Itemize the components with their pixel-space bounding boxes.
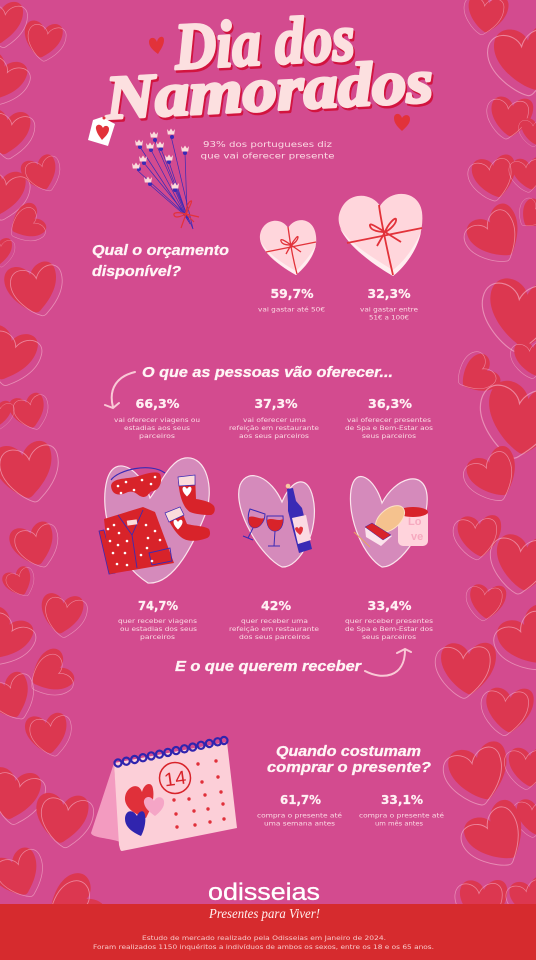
stat: offer trips: vai oferecer viagens ou <box>114 416 200 424</box>
stat: 32,3%: vai gastar entre <box>360 306 418 314</box>
stat: receive meal: refeição em restaurante <box>229 625 319 633</box>
stat: offer spa: de Spa e Bem-Estar aos <box>345 424 434 432</box>
stat: 32,3%: 51€ a 100€ <box>369 314 409 322</box>
icon: large gift heart <box>339 194 422 276</box>
heading: when they buy: Quando costumam <box>276 744 421 760</box>
icon: red heart left of title <box>149 37 164 54</box>
title <box>100 0 436 135</box>
stat: 33,1%: 33,1% <box>381 792 423 807</box>
stat: offer trips: estadias aos seus <box>124 424 191 432</box>
arrow: up to receive stats <box>365 649 411 676</box>
stat: 61,7%: compra o presente até <box>257 812 342 820</box>
tagline: Presentes para Viver! <box>208 907 320 922</box>
stat: receive spa: 33,4% <box>368 598 412 613</box>
stat: receive meal: dos seus parceiros <box>239 633 311 641</box>
footnote: Foram realizados 1150 inquéritos a indivíduos de ambos os sexos, entre os 18 e os 65 anos. <box>93 943 434 951</box>
stat: 59,7% <box>258 286 325 314</box>
stat: receive trips: ou estadias dos seus <box>120 625 198 633</box>
stat: offer meal: 37,3% <box>254 396 298 411</box>
footer band <box>0 904 536 960</box>
stat: receive meal: quer receber uma <box>241 617 308 625</box>
stat: receive trips <box>118 598 198 641</box>
icon: gift tag <box>88 116 115 146</box>
stat: receive trips: quer receber viagens <box>118 617 198 625</box>
stat: 61,7%: 61,7% <box>280 792 321 807</box>
heading: what people want to receive: E o que querem receber <box>175 659 363 675</box>
stat: receive trips: 74,7% <box>138 598 178 613</box>
stat: offer spa: vai oferecer presentes <box>347 416 432 424</box>
illustration: candle and matches <box>350 477 428 567</box>
stat: receive spa <box>345 598 434 641</box>
stat: offer spa <box>345 396 434 440</box>
stat: offer meal: refeição em restaurante <box>229 424 319 432</box>
heading: budget: Qual o orçamento <box>92 243 229 259</box>
stat: offer spa: 36,3% <box>368 396 412 411</box>
illustration: calendar <box>91 737 237 851</box>
heading: what people will give: O que as pessoas vão oferecer... <box>142 365 393 381</box>
stat: 33,1%: um mês antes <box>375 820 424 828</box>
illustration: calendar: 14 <box>163 767 188 791</box>
stat: receive trips: parceiros <box>140 633 176 641</box>
illustration: wine glasses and bottle <box>239 476 314 567</box>
illustration: bouquet <box>132 128 199 229</box>
stat: 59,7%: vai gastar até 50€ <box>258 306 325 314</box>
illustration: candle and matches: Lo <box>408 516 422 528</box>
intro text: 93% dos portugueses diz <box>203 140 332 149</box>
illustration: candle and matches: ve <box>411 531 423 543</box>
icon: small gift heart <box>260 220 316 275</box>
stat: 33,1%: compra o presente até <box>359 812 444 820</box>
intro text <box>200 140 335 160</box>
icon: red heart right of title <box>394 114 410 131</box>
hearts: left column <box>0 0 114 951</box>
stat: offer meal: aos seus parceiros <box>239 432 310 440</box>
logo: odisseias: odisseias <box>208 879 320 906</box>
stat: receive meal <box>229 598 319 641</box>
stat: offer spa: seus parceiros <box>362 432 417 440</box>
stat: offer trips <box>114 396 200 440</box>
stat: 33,1% <box>359 792 444 828</box>
arrow: down to offers <box>105 372 135 408</box>
stat: 32,3% <box>360 286 418 322</box>
title: Namorados <box>102 48 435 133</box>
title: Dia dos <box>174 4 358 86</box>
heading: budget: disponível? <box>92 264 181 280</box>
stat: offer trips: 66,3% <box>136 396 180 411</box>
illustration: pyjamas and socks <box>99 458 215 583</box>
hearts: right column <box>435 0 536 928</box>
stat: receive meal: 42% <box>261 598 291 613</box>
stat: offer trips: parceiros <box>139 432 176 440</box>
stat: 61,7%: uma semana antes <box>264 820 336 828</box>
heading: budget <box>92 243 229 280</box>
intro text: que vai oferecer presente <box>200 152 335 160</box>
footnote: Estudo de mercado realizado pela Odisseias em Janeiro de 2024. <box>142 934 386 942</box>
stat: 59,7%: 59,7% <box>270 286 314 301</box>
stat: offer meal: vai oferecer uma <box>243 416 306 424</box>
stat: receive spa: seus parceiros <box>362 633 417 641</box>
stat: 32,3%: 32,3% <box>368 286 411 301</box>
stat: 61,7% <box>257 792 342 828</box>
title: Namorados <box>104 50 436 135</box>
heading: when they buy: comprar o presente? <box>267 760 431 776</box>
footnote <box>93 934 434 951</box>
stat: offer meal <box>229 396 319 440</box>
stat: receive spa: de Spa e Bem-Estar dos <box>345 625 434 633</box>
title: Dia dos <box>172 2 356 84</box>
stat: receive spa: quer receber presentes <box>345 617 434 625</box>
heading: when they buy <box>267 744 431 776</box>
